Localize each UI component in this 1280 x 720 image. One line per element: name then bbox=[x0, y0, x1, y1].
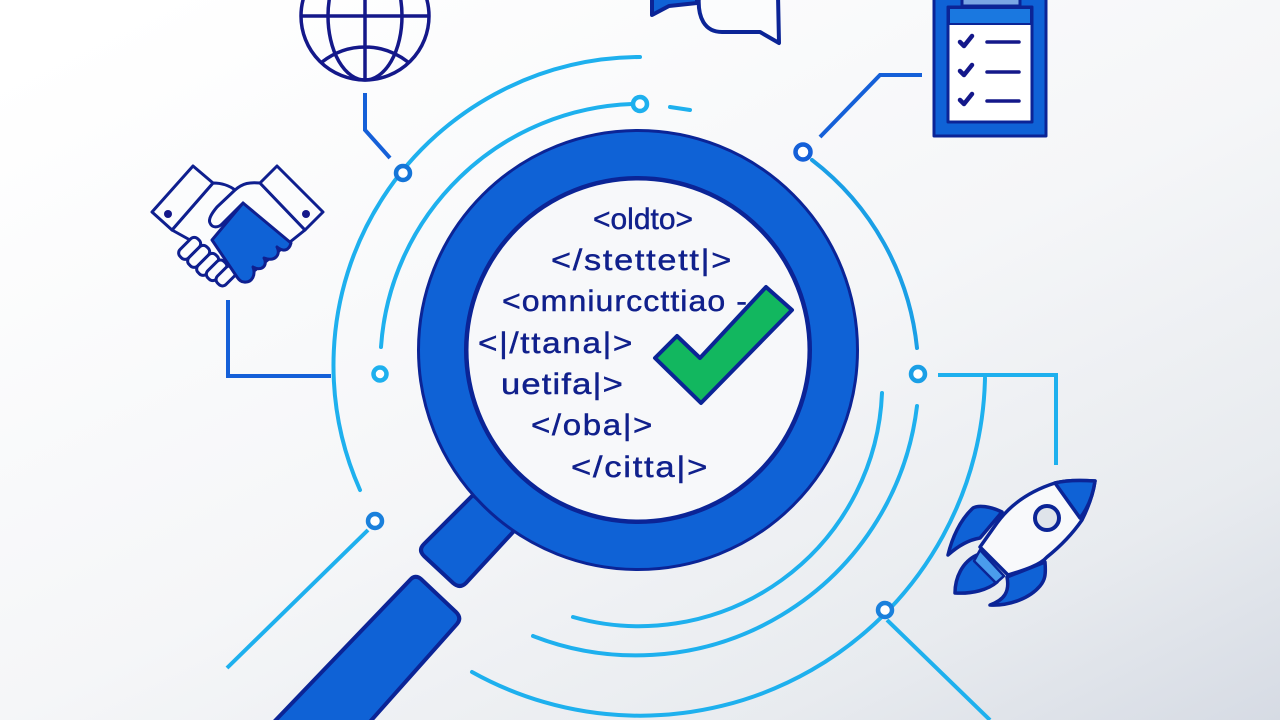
circuit arcs bbox=[333, 57, 985, 716]
code lines: <oldto> bbox=[593, 203, 693, 236]
code lines: uetifa|> bbox=[501, 368, 624, 401]
handle neck bbox=[421, 495, 515, 586]
thumb bbox=[209, 190, 243, 227]
white hand back bbox=[172, 183, 305, 280]
code lines bbox=[478, 203, 748, 484]
magnifying glass bbox=[272, 154, 834, 720]
lens ring fill bbox=[442, 154, 834, 546]
blue bubble bbox=[652, 0, 697, 15]
nose cone bbox=[1055, 480, 1095, 518]
green check mark bbox=[655, 287, 792, 403]
icon: globe bbox=[301, 0, 429, 80]
white bubble bbox=[699, 0, 779, 43]
left cuff bbox=[152, 166, 213, 230]
connector nodes bbox=[368, 97, 925, 617]
upper fin bbox=[948, 506, 1002, 555]
code lines: </oba|> bbox=[531, 409, 654, 442]
window bbox=[1035, 506, 1059, 530]
body bbox=[980, 480, 1095, 575]
blue hand bbox=[212, 203, 291, 282]
code lines: </stettett|> bbox=[551, 244, 733, 277]
code lines: </citta|> bbox=[571, 451, 709, 484]
nozzle bbox=[974, 550, 1004, 583]
icon: speech bubbles bbox=[652, 0, 779, 43]
board bbox=[934, 0, 1046, 136]
icon: clipboard bbox=[934, 0, 1046, 136]
check list bbox=[960, 36, 1019, 104]
fingers bbox=[177, 235, 238, 288]
paper header bbox=[949, 8, 1031, 24]
icon: handshake bbox=[152, 166, 323, 288]
handle grip bbox=[272, 577, 459, 720]
code lines: <omniurccttiao - bbox=[502, 285, 748, 318]
connector lines bbox=[227, 75, 1056, 720]
right cuff bbox=[260, 166, 323, 230]
clip bbox=[962, 0, 1020, 6]
paper bbox=[948, 7, 1032, 122]
lower fin bbox=[990, 562, 1045, 605]
left fin bbox=[955, 555, 997, 593]
icon: rocket bbox=[948, 480, 1095, 605]
code lines: <|/ttana|> bbox=[478, 327, 634, 360]
lens ring outline bbox=[442, 154, 834, 546]
lens glass bbox=[466, 178, 810, 522]
cuff buttons bbox=[164, 210, 310, 218]
